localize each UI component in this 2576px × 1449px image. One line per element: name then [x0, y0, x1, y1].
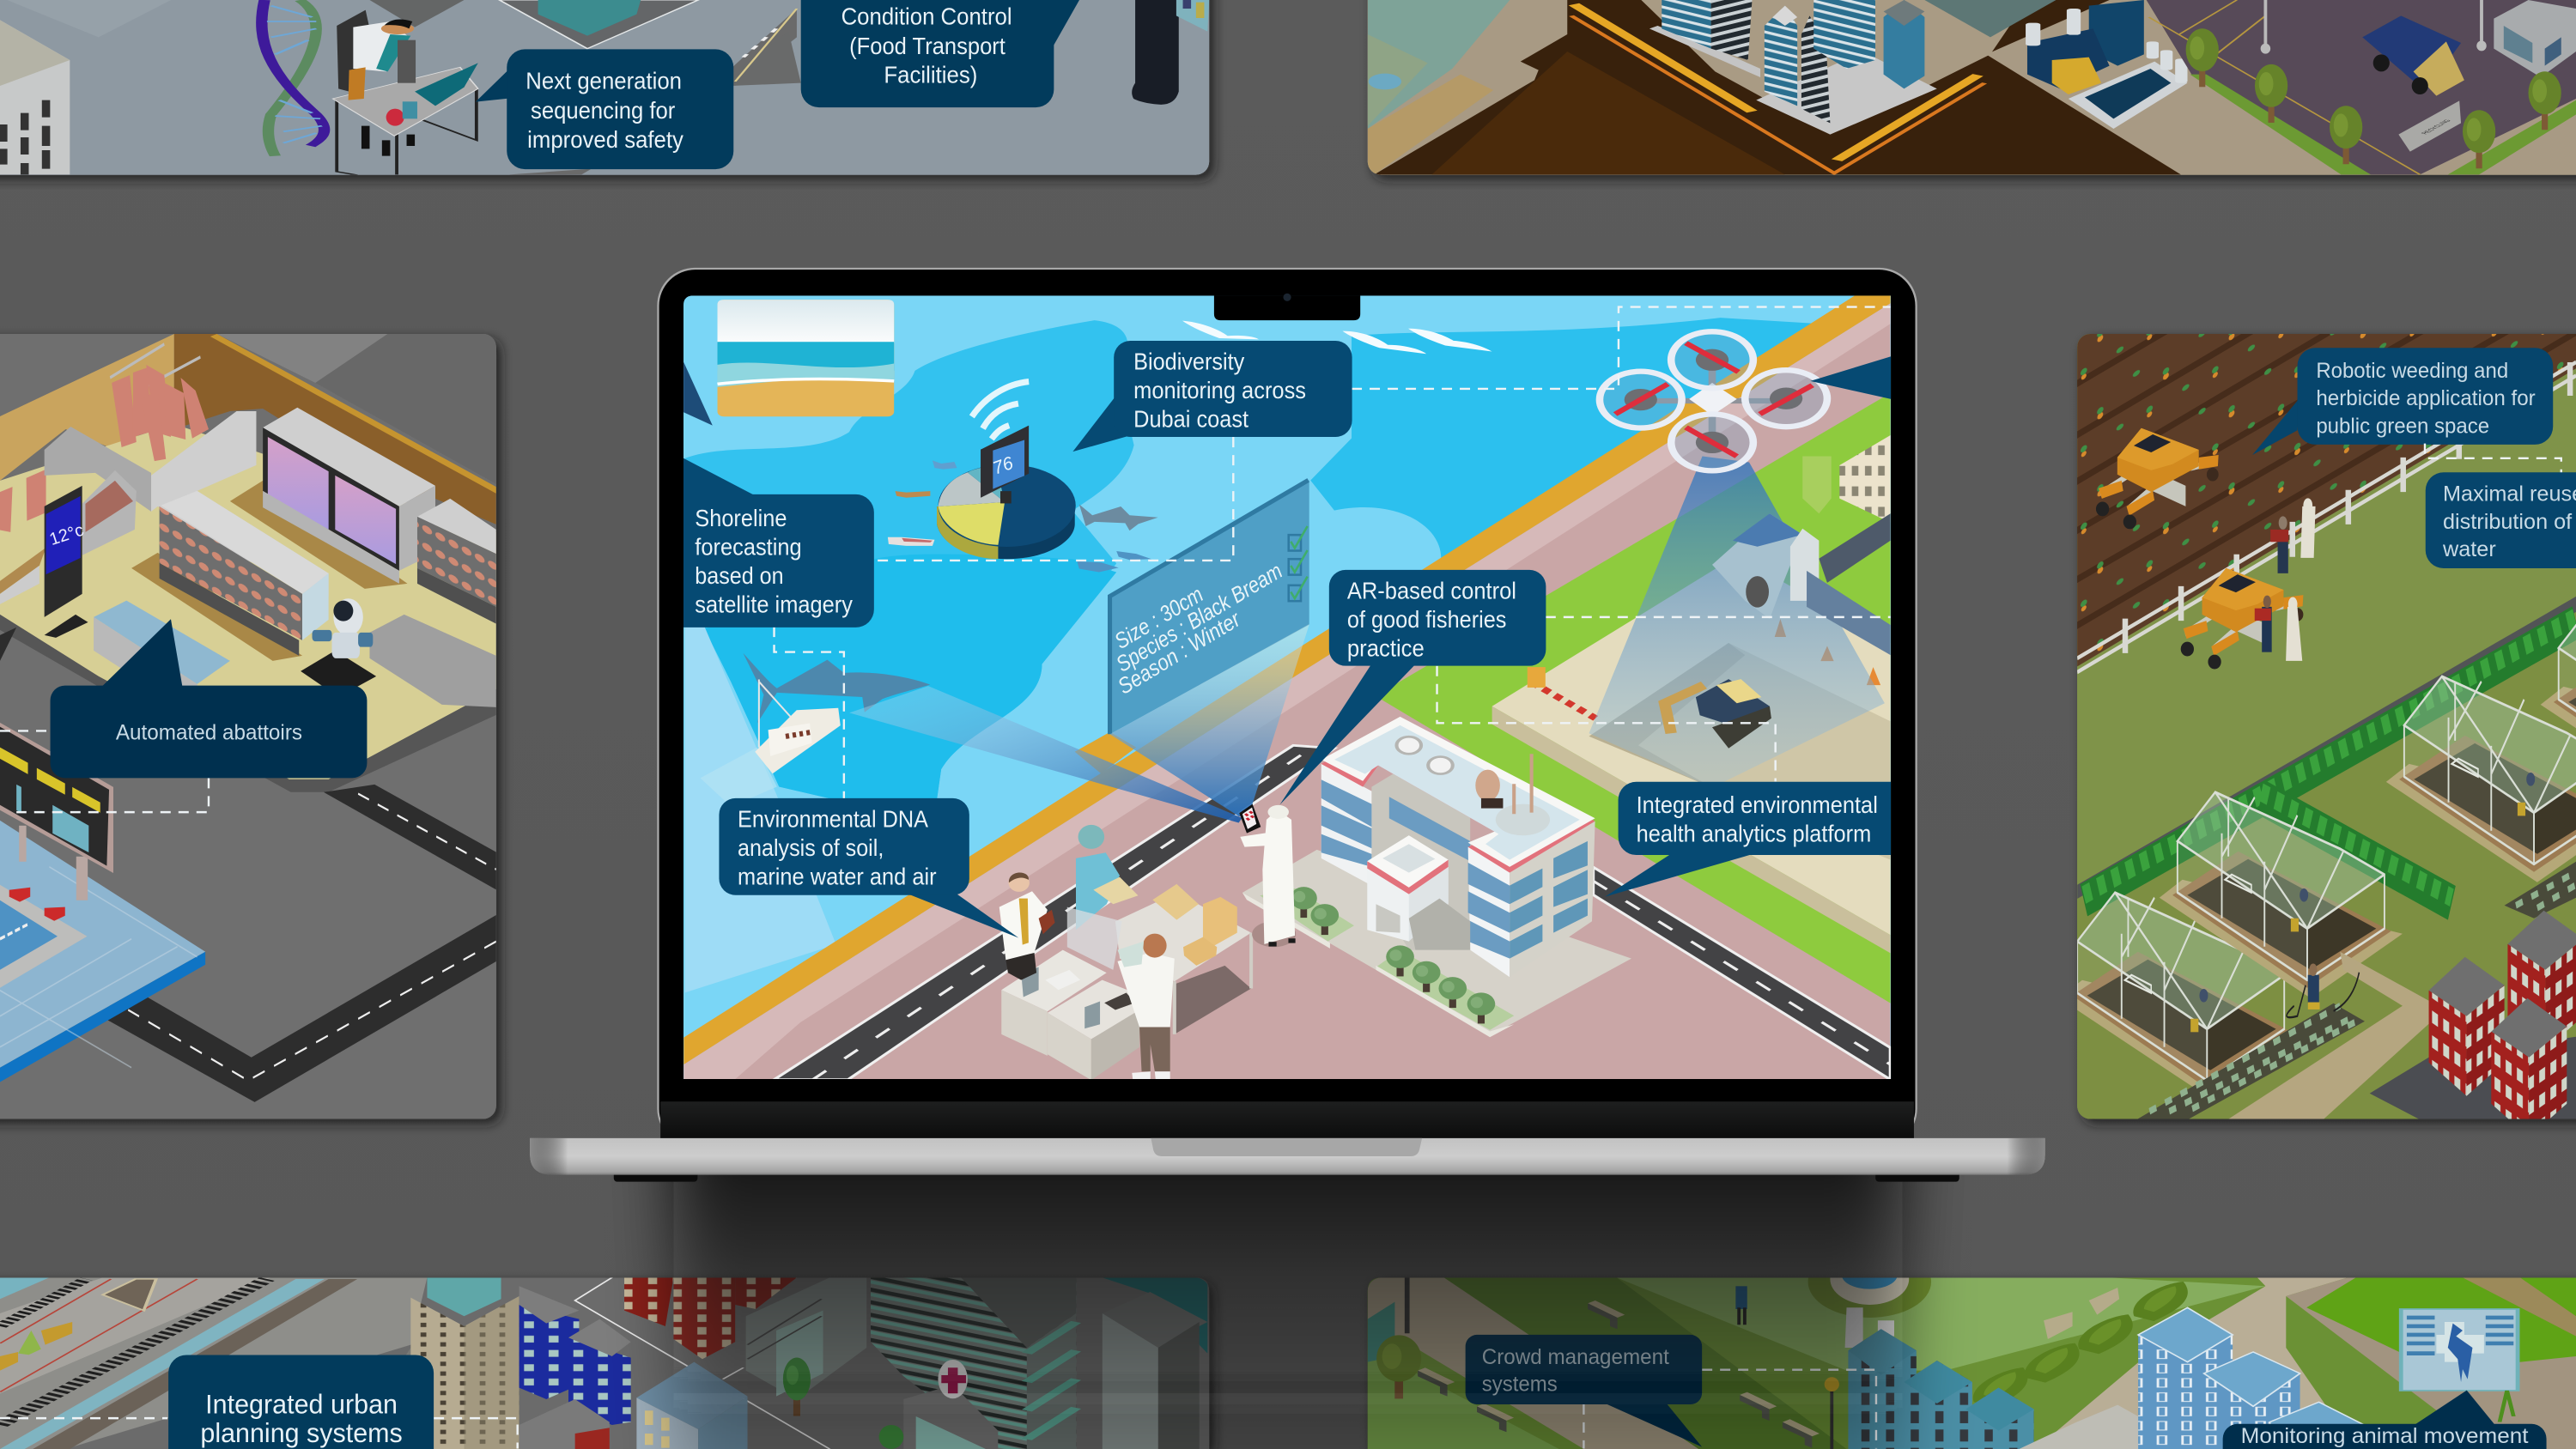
- icon: standing figure in black abaya: [1132, 0, 1179, 105]
- panel: food safety and transport, top left: [0, 0, 1216, 178]
- data panel text: Size : 30cm: [1109, 581, 1207, 654]
- hospital entrance: [1367, 835, 1470, 950]
- callout: environmental DNA: [719, 798, 1018, 937]
- camera notch: [1214, 294, 1360, 320]
- red apartment blocks: [2429, 911, 2576, 1137]
- icon: side building: [0, 20, 70, 174]
- drone camera beam: [1589, 457, 1885, 787]
- trees: [1291, 887, 1495, 1023]
- dashed connector: [0, 1418, 518, 1449]
- plinth with planters: [1242, 850, 1631, 1037]
- beige tower: [410, 1277, 519, 1449]
- data panel text: Season : Winter: [1113, 605, 1246, 699]
- hanging meat: [0, 344, 209, 532]
- icon: hospital sign: [903, 1360, 998, 1449]
- callout: robotic weeding: public green space: [2316, 414, 2489, 438]
- callout: next generation sequencing: sequencing for: [531, 97, 675, 124]
- callout: robotic weeding: Robotic weeding and: [2316, 359, 2508, 383]
- holographic data panel: [1110, 480, 1309, 734]
- callout: condition control: Condition Control: [841, 3, 1012, 30]
- callout: next generation sequencing: Next generation: [526, 67, 682, 94]
- laptop cast shadow: [673, 1169, 1903, 1449]
- teal towers: [1848, 1329, 2034, 1449]
- sign: recycling center: [2398, 100, 2461, 152]
- robot butcher: [301, 598, 376, 687]
- callout: robotic weeding: herbicide application for: [2316, 386, 2536, 410]
- label: kiosk temperature: 12°c: [47, 521, 86, 549]
- trees, lamps and people: [1368, 1277, 1894, 1449]
- pie chart: [937, 382, 1076, 559]
- callout: shoreline forecasting: satellite imagery: [695, 591, 853, 618]
- hedge along service road: [2077, 597, 2576, 903]
- icon: scientist at microscope desk: [332, 10, 478, 175]
- excavated ground: [1374, 0, 2181, 174]
- callout: robotic weeding: [2252, 348, 2553, 455]
- delivery truck and depots: [1712, 435, 1891, 655]
- green field: [1376, 393, 1891, 1003]
- icon: DNA helix: [262, 0, 325, 156]
- sensor reading: 76: [990, 453, 1016, 479]
- street lines: [575, 1277, 829, 1449]
- callout: integrated environmental health: Integrated environmental: [1637, 791, 1878, 818]
- dashed connector: [1583, 1370, 1876, 1449]
- callout: automated abattoirs: [51, 619, 367, 778]
- data panel text: Species : Black Bream: [1111, 558, 1286, 677]
- callout: crowd management: [1466, 1335, 1702, 1447]
- callout: integrated environmental health: health analytics platform: [1637, 821, 1871, 847]
- callout: AR-based control: [1279, 570, 1546, 805]
- callout: biodiversity monitoring: monitoring across: [1133, 377, 1306, 403]
- kiosk with temperature screen: [45, 486, 88, 638]
- agricultural robots and people: [2096, 428, 2316, 669]
- survey boat: [755, 680, 841, 773]
- callout: reuse of water: [2426, 472, 2576, 568]
- callout: AR-based control: practice: [1347, 634, 1425, 661]
- wall and counters: [0, 411, 329, 604]
- callout: reuse of water: water: [2442, 537, 2496, 561]
- chilled display fridge: [263, 408, 435, 584]
- callout: monitoring animal movement: [2223, 1391, 2547, 1449]
- callout: environmental DNA: marine water and air: [738, 863, 937, 889]
- solar satellite panel: [683, 362, 713, 426]
- fountain: [1808, 1246, 1931, 1318]
- white fence: [2077, 362, 2576, 672]
- dashed connector between callouts: [2425, 444, 2561, 473]
- teal scrub worker: [1076, 825, 1138, 930]
- side display: [417, 499, 496, 624]
- data panel text: [1109, 558, 1286, 699]
- panel: automated abattoirs, left: [0, 326, 526, 1150]
- callout: environmental DNA: analysis of soil,: [738, 834, 884, 861]
- callout: condition control: Facilities): [884, 62, 977, 88]
- hospital and lab scene: [999, 717, 1631, 1080]
- road network: [0, 627, 500, 1102]
- callout: biodiversity monitoring: Biodiversity: [1133, 348, 1245, 374]
- callout: AR-based control: AR-based control: [1347, 577, 1516, 603]
- eDNA beam to sea: [849, 686, 1242, 823]
- fish and sharks: [888, 460, 1158, 573]
- panel: integrated urban planning, bottom left: [0, 1276, 1216, 1449]
- utility pipes: [1571, 4, 1984, 173]
- store floor: [0, 424, 496, 792]
- lab tables: [1001, 907, 1142, 1080]
- construction site: [1492, 555, 1891, 953]
- callout: AR-based control: of good fisheries: [1347, 606, 1506, 633]
- callout: shoreline forecasting: forecasting: [695, 534, 802, 561]
- laptop lid and bezel: [657, 268, 1917, 1146]
- roadside trees: [2186, 28, 2561, 168]
- coastal strip: [683, 295, 1891, 1080]
- callout: shoreline forecasting: [683, 458, 874, 627]
- parking lot with lines: [2147, 0, 2576, 174]
- benches and hedges: [1418, 1282, 2188, 1448]
- callout: automated abattoirs: Automated abattoirs: [116, 721, 302, 745]
- callout: shoreline forecasting: based on: [695, 562, 784, 589]
- callout: crowd management: Crowd management: [1482, 1345, 1669, 1369]
- tilled soil: [2061, 316, 2576, 676]
- slate-blue building: [636, 1362, 748, 1449]
- callout: condition control: [801, 0, 1079, 107]
- scoreboard: [0, 723, 113, 900]
- long table and boxes: [1115, 884, 1251, 1034]
- blue apartment blocks: [519, 1286, 631, 1449]
- screen: Dubai coastal monitoring scene: [653, 258, 1941, 1080]
- road: [775, 745, 1891, 1080]
- callout: environmental DNA: Environmental DNA: [738, 805, 929, 832]
- rail station: [0, 1277, 427, 1449]
- store walls: [0, 334, 496, 524]
- whale shark: [743, 653, 930, 724]
- excavator: [1665, 679, 1771, 749]
- callout: integrated environmental health: [1605, 782, 1891, 897]
- scientist with clipboard: [999, 873, 1055, 980]
- recycling plant: [2026, 0, 2188, 129]
- offshore scene: data panel, pie chart, fish and boat: [683, 362, 1309, 773]
- callout: integrated urban planning: [168, 1355, 434, 1449]
- panel: robotic farming, right: [2059, 316, 2576, 1150]
- icon: veterinary sign with giraffe: [2401, 1309, 2518, 1391]
- gardener with hose: [2287, 964, 2359, 1017]
- drone: [1600, 331, 1827, 470]
- callout: condition control: (Food Transport: [849, 33, 1005, 59]
- hospital building: [1321, 717, 1595, 977]
- street trees: [783, 1358, 903, 1449]
- skyscrapers: [1649, 0, 1937, 135]
- seabirds: [1182, 321, 1492, 354]
- panel: underground utilities and recycling centre, top right: [1362, 0, 2576, 178]
- blue office towers: [2138, 1307, 2364, 1449]
- meat display counter: [160, 491, 329, 656]
- laptop: [530, 258, 2045, 1182]
- callout: shoreline forecasting: Shoreline: [695, 505, 787, 531]
- callout: monitoring animal movement: Monitoring animal movement: [2241, 1424, 2529, 1448]
- garden paths and melon rows: [2133, 862, 2576, 1122]
- freezer: [94, 601, 230, 686]
- laptop base: [530, 1138, 2045, 1182]
- swimming pool deck: [0, 821, 205, 1082]
- callout: integrated urban planning: planning systems: [200, 1417, 403, 1448]
- service counter: [369, 615, 496, 707]
- official with AR tablet: [1239, 804, 1296, 947]
- AR beam to data panel: [1110, 624, 1309, 816]
- beach photo inset: [718, 300, 894, 416]
- icon: guard booth: [2494, 0, 2576, 77]
- sea currents: [685, 320, 1134, 992]
- callout: crowd management: systems: [1482, 1373, 1558, 1397]
- sea, upper right: [1310, 318, 1819, 559]
- callout tail pointing at drone: [1810, 356, 1891, 399]
- scientist at bench: [1117, 934, 1175, 1080]
- callout: biodiversity monitoring: [1072, 341, 1352, 452]
- grey high-rise towers: [746, 1277, 1207, 1449]
- callout: biodiversity monitoring: Dubai coast: [1133, 405, 1249, 432]
- red apartment blocks: [624, 1277, 797, 1359]
- callout: next generation sequencing: improved safety: [527, 126, 683, 153]
- panel: crowd management and animal care, bottom right: [1362, 1246, 2576, 1449]
- dashed connectors: [775, 307, 1891, 798]
- callout: next generation sequencing: [476, 49, 733, 169]
- lawn and paths: [1368, 1277, 2576, 1449]
- sign: recycling center: RECYCLING: [2420, 119, 2453, 135]
- greenhouses: [2059, 599, 2576, 1099]
- icon: collection truck: [2362, 15, 2464, 96]
- callout: integrated urban planning: Integrated urban: [205, 1388, 398, 1419]
